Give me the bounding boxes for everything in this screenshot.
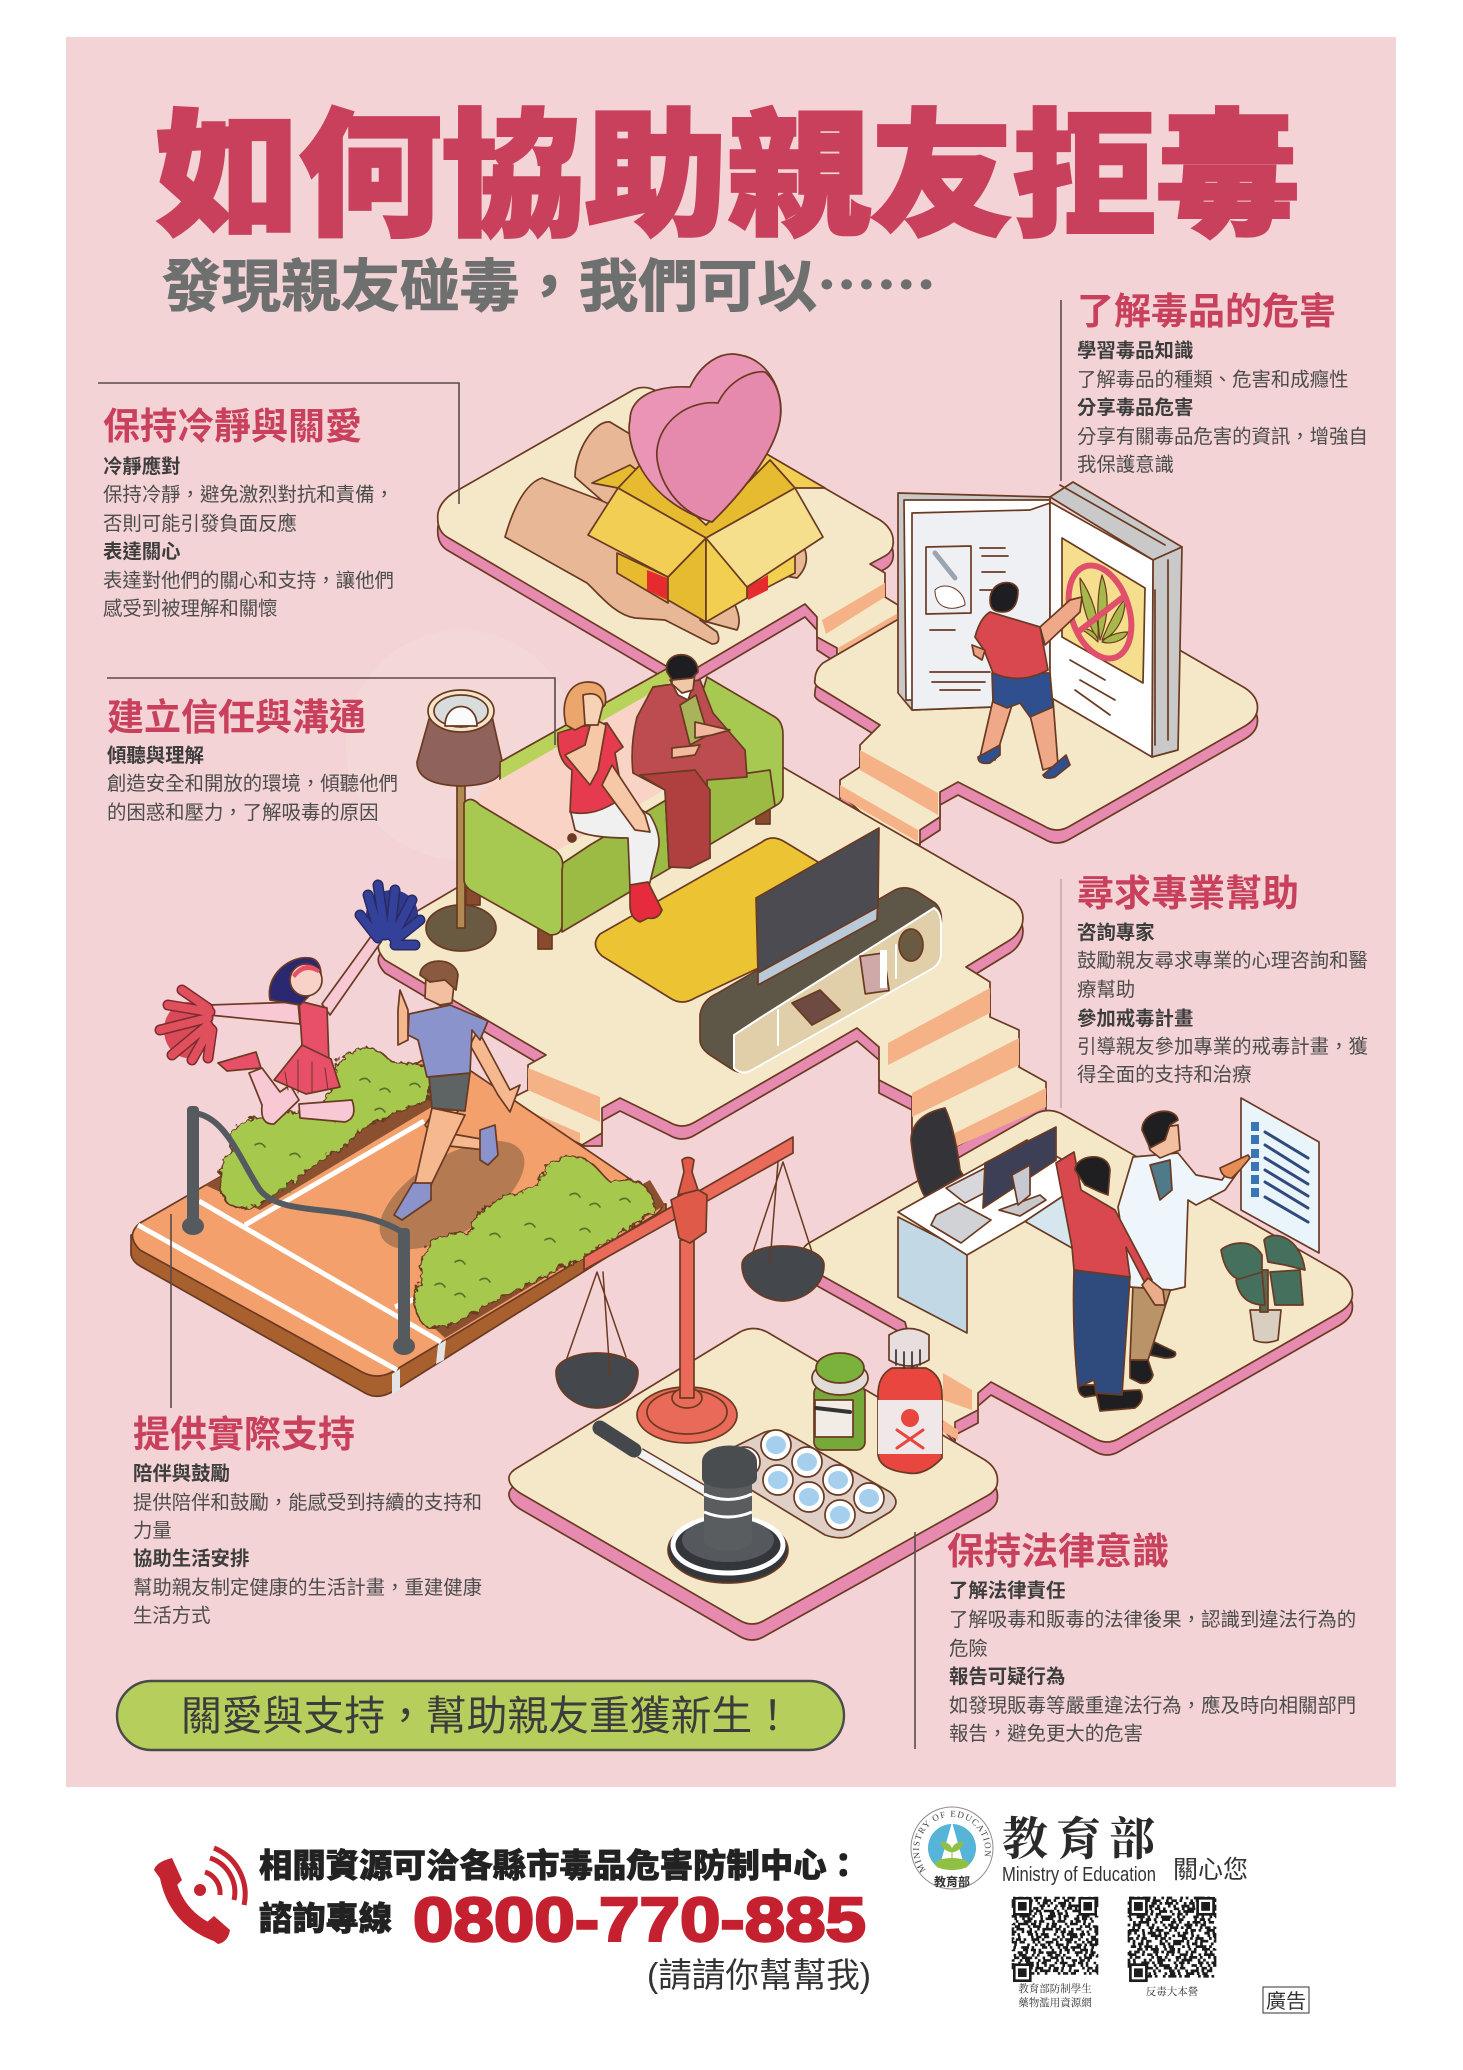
slogan pill: 關愛與支持，幫助親友重獲新生！ xyxy=(181,1693,793,1739)
platform: running track xyxy=(131,885,666,1396)
text block: understand the harm: 了解毒品的種類、危害和成癮性 xyxy=(1077,369,1348,391)
text block: stay calm: 感受到被理解和關懷 xyxy=(103,598,278,620)
icon: pill blister pack xyxy=(728,1430,896,1538)
text block: understand the harm: 我保護意識 xyxy=(1077,454,1174,476)
text block: professional help: 引導親友參加專業的戒毒計畫，獲 xyxy=(1077,1036,1368,1058)
man reading xyxy=(972,583,1082,778)
text block: practical support: 提供陪伴和鼓勵，能感受到持續的支持和 xyxy=(133,1492,482,1514)
platform: law and pills xyxy=(509,1137,998,1640)
text block: legal awareness xyxy=(947,1531,1356,1745)
sick man under blanket xyxy=(632,655,747,868)
icon: poison bottle xyxy=(878,1328,942,1473)
platform: book xyxy=(815,482,1258,845)
text block: legal awareness: 報告可疑行為 xyxy=(949,1666,1065,1688)
ministry name: 教育部 xyxy=(1002,1803,1155,1869)
text block: professional help xyxy=(1077,873,1368,1086)
icon: green pill bottle xyxy=(812,1353,868,1450)
runner xyxy=(394,961,520,1220)
icon: heart xyxy=(629,354,781,522)
text block: professional help: 療幫助 xyxy=(1077,979,1135,1001)
text block: understand the harm: 分享毒品危害 xyxy=(1077,396,1193,419)
QR code 1 xyxy=(1013,1898,1097,1981)
advertisement tag: 廣告 xyxy=(1266,1990,1306,2013)
platform: doctor consultation xyxy=(802,1098,1352,1455)
runner shadow xyxy=(362,1119,542,1271)
text block: stay calm: 表達關心 xyxy=(103,541,181,563)
pink poster panel xyxy=(66,37,1396,1787)
text block: understand the harm: 分享有關毒品危害的資訊，增強自 xyxy=(1077,426,1368,448)
doctor xyxy=(1118,1111,1250,1383)
text block: practical support: 協助生活安排 xyxy=(133,1547,249,1570)
text block: understand the harm xyxy=(1077,291,1368,476)
logo: ministry of education: MINISTRY OF EDUCATION xyxy=(913,1810,991,1874)
text block: stay calm: 冷靜應對 xyxy=(103,455,181,478)
chair and desk xyxy=(898,1108,1072,1333)
cabinet and TV xyxy=(700,828,941,1073)
logo: ministry of education: 教育部 xyxy=(934,1874,970,1889)
text block: stay calm xyxy=(103,406,394,620)
text block: build trust: 創造安全和開放的環境，傾聽他們 xyxy=(107,773,398,795)
text block: professional help: 得全面的支持和治療 xyxy=(1077,1064,1252,1086)
text block: practical support: 幫助親友制定健康的生活計畫，重建健康 xyxy=(133,1577,482,1599)
checklist board xyxy=(1241,1098,1319,1253)
icon: open book xyxy=(898,482,1182,757)
QR captions: 教育部防制學生 xyxy=(1018,1981,1092,1996)
text block: legal awareness: 報告，避免更大的危害 xyxy=(949,1723,1143,1745)
icon: scales of justice xyxy=(556,1137,824,1443)
QR captions: 反毒大本營 xyxy=(1146,1984,1198,1999)
text block: professional help: 咨詢專家 xyxy=(1077,921,1155,944)
hedges xyxy=(205,1048,665,1338)
text block: stay calm: 保持冷靜與關愛 xyxy=(103,406,362,447)
subtitle: 發現親友碰毒，我們可以 ⋯⋯ xyxy=(162,241,936,323)
QR captions xyxy=(1018,1981,1198,2010)
hotline text: (請請你幫幫我) xyxy=(647,1957,871,1995)
hotline text: 諮詢專線 xyxy=(259,1900,392,1937)
text block: legal awareness: 危險 xyxy=(949,1638,988,1660)
text block: legal awareness: 如發現販毒等嚴重違法行為，應及時向相關部門 xyxy=(949,1694,1356,1717)
ministry name: 關心您 xyxy=(1173,1856,1248,1884)
hotline text: 0800-770-885 xyxy=(413,1886,866,1955)
woman in red xyxy=(558,682,662,922)
text block: practical support: 提供實際支持 xyxy=(133,1414,355,1455)
potted plant xyxy=(1221,1235,1305,1342)
ministry name: Ministry of Education xyxy=(1002,1864,1156,1886)
title: 如何協助親友拒毒 xyxy=(156,101,1299,254)
icon: banned leaf xyxy=(1058,557,1142,667)
rug xyxy=(595,838,818,1002)
text block: professional help: 鼓勵親友尋求專業的心理咨詢和醫 xyxy=(1077,950,1368,972)
text block: build trust: 傾聽與理解 xyxy=(107,745,204,767)
leader lines xyxy=(98,300,1061,1749)
text block: build trust xyxy=(107,697,398,824)
text block: practical support xyxy=(133,1414,482,1627)
icon: phone xyxy=(154,1848,245,1944)
text block: professional help: 尋求專業幫助 xyxy=(1077,873,1299,914)
sofa xyxy=(464,668,783,949)
text block: practical support: 力量 xyxy=(133,1520,172,1542)
pom-poms xyxy=(160,885,420,1060)
ministry name xyxy=(1002,1803,1248,1886)
icon: gift box xyxy=(588,453,825,622)
text block: practical support: 陪伴與鼓勵 xyxy=(133,1462,230,1485)
slogan pill xyxy=(117,1681,844,1750)
text block: legal awareness: 了解法律責任 xyxy=(949,1580,1065,1602)
text block: build trust: 建立信任與溝通 xyxy=(107,697,366,738)
cheerleader xyxy=(209,935,381,1124)
text block: stay calm: 表達對他們的關心和支持，讓他們 xyxy=(103,570,394,592)
text block: practical support: 生活方式 xyxy=(133,1605,211,1627)
text block: professional help: 參加戒毒計畫 xyxy=(1077,1007,1193,1030)
icon: gavel xyxy=(600,1428,788,1583)
QR code 2 xyxy=(1129,1898,1215,1981)
text block: build trust: 的困惑和壓力，了解吸毒的原因 xyxy=(107,802,378,824)
text block: understand the harm: 學習毒品知識 xyxy=(1077,340,1193,362)
text block: legal awareness: 了解吸毒和販毒的法律後果，認識到違法行為的 xyxy=(949,1609,1356,1631)
text block: legal awareness: 保持法律意識 xyxy=(947,1531,1169,1572)
patient xyxy=(1056,1152,1165,1411)
lamp xyxy=(417,690,503,951)
platform: heart and box xyxy=(438,354,898,689)
hotline text xyxy=(259,1847,871,1995)
rope barrier xyxy=(182,1106,415,1355)
text block: stay calm: 保持冷靜，避免激烈對抗和責備， xyxy=(103,484,394,506)
icon: open hand xyxy=(505,422,806,644)
hotline text: 相關資源可洽各縣市毒品危害防制中心： xyxy=(259,1847,860,1884)
text block: stay calm: 否則可能引發負面反應 xyxy=(103,512,297,535)
platform: living room xyxy=(378,655,1046,1173)
text block: understand the harm: 了解毒品的危害 xyxy=(1077,291,1336,332)
QR captions: 藥物濫用資源網 xyxy=(1018,1995,1092,2010)
